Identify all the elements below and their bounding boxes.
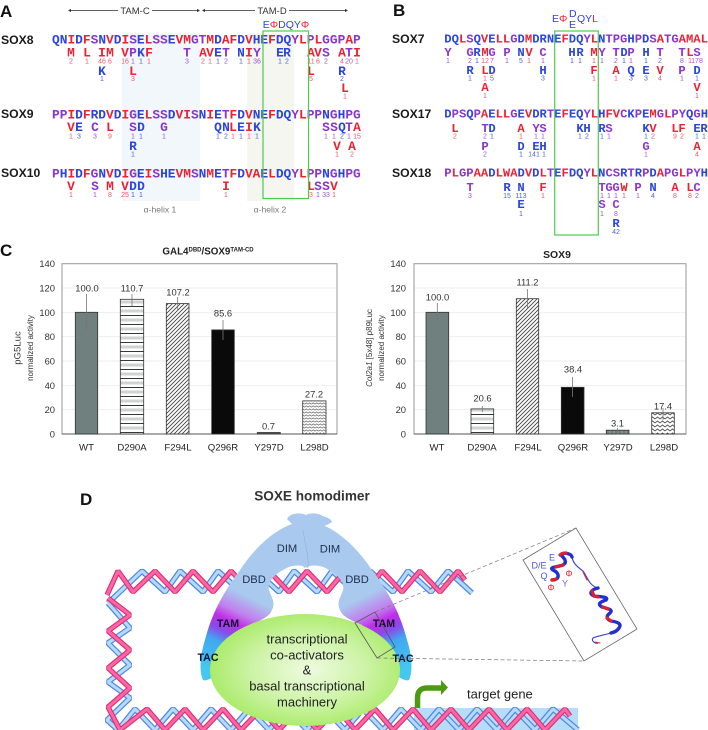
y axis ticks right: 60 xyxy=(396,356,406,366)
TAM-C range arrow: TAM-C xyxy=(120,6,150,17)
SOX8 variant counts row 1: 2 xyxy=(324,58,328,66)
SOX17 variants row 2: 1 xyxy=(644,152,648,158)
SOX7 variant counts row 2: 1 xyxy=(695,76,699,82)
value labels right: 17.4 xyxy=(654,400,672,412)
TAM-D range arrow xyxy=(202,6,348,17)
SOX8 variants row 2 and 3: L xyxy=(341,81,349,96)
zoomed structure panel: Y xyxy=(562,578,568,588)
category labels right xyxy=(430,442,678,454)
SOX8 variants row 2 and 3: K LL R xyxy=(98,64,346,79)
value labels right: 20.6 xyxy=(473,392,492,404)
SOX9 sequence: PPIDFRDVDIGELSSDVISNIETFDVNEFDQYLPPNGHPG xyxy=(52,108,361,122)
SOX9 variants row 2: 1 xyxy=(131,152,135,158)
SOX9 variant counts row 1: 1 xyxy=(255,134,259,140)
chart title left: DBD xyxy=(189,248,202,254)
SOX9 variant counts row 1: 1 xyxy=(332,134,336,140)
SOX9 variants row 2: 2 xyxy=(350,152,354,158)
value labels right: 38.4 xyxy=(564,364,582,374)
y axis ticks right: 0 xyxy=(401,428,406,440)
SOX9 variant counts row 1: 3 xyxy=(77,134,81,140)
SOX9 variant counts row 1: 1 xyxy=(139,134,143,140)
SOX9 variant counts row 1: 1 xyxy=(231,134,235,140)
bars left xyxy=(75,299,326,434)
SOX17 variant counts row 1: 1 xyxy=(490,134,494,140)
SOX17 variant counts row 1: 2 xyxy=(453,134,457,140)
SOX7 variant counts row 1: 1 xyxy=(688,58,692,65)
SOX9 variants row 2: R VA xyxy=(129,139,356,154)
SOX7 variant counts row 2: 1 xyxy=(680,76,684,82)
y axis subtitle right: normalized activity xyxy=(377,315,386,381)
SOX8 variant counts row 1: 36 xyxy=(253,58,261,66)
SOX7 variant counts row 1: 5 xyxy=(519,58,523,65)
y axis ticks left: 140 xyxy=(39,258,55,269)
SOX8 variant counts row 1: 6 xyxy=(108,58,112,66)
category labels left: Q296R xyxy=(208,442,238,454)
SOX18 variant counts row 1: 113 xyxy=(515,193,527,200)
category labels right: Q296R xyxy=(558,442,588,454)
SOX18 variants rows 2 and 3: 42 xyxy=(612,229,620,236)
category labels right: WT xyxy=(430,442,445,454)
SOX7 variants row 1: YGRMGP NV C HR MYTDP H TTLS xyxy=(444,46,701,60)
SOX10 label: SOX10 xyxy=(1,166,41,180)
SOX17 variant counts row 1: 1 xyxy=(534,134,538,140)
SOX10 variant counts: 1 xyxy=(332,192,336,199)
SOX8 variant counts row 1: 2 xyxy=(69,58,73,66)
SOX7 variant counts row 1: 12 xyxy=(481,58,489,65)
SOX7 variant counts row 2: 1 xyxy=(614,76,618,82)
DIM label right: DIM xyxy=(320,544,340,556)
y axis ticks left: 40 xyxy=(45,380,55,391)
TAM-D consensus A: EΦDQYΦ xyxy=(263,19,309,31)
SOXE monomer left xyxy=(201,513,311,680)
SOX17 variant counts row 1: 1 xyxy=(519,134,523,140)
SOX18 variant counts row 1: 1 xyxy=(541,193,545,200)
y axis ticks left xyxy=(39,258,55,440)
SOX7 variants row 3: AV xyxy=(481,81,701,95)
y axis title right: Col2a1 [5x48] p89Luc xyxy=(365,309,374,387)
SOX17 variant counts row 1: 1 xyxy=(578,134,582,140)
panel letter D: D xyxy=(80,490,92,509)
SOX9 variants row 1: VE C L SD G QNLEIK SSQTA xyxy=(67,120,361,135)
SOX18 variant counts row 1: 4 xyxy=(651,193,655,200)
y axis title left: pG5Luc xyxy=(12,331,24,365)
category labels right: L298D xyxy=(650,442,678,454)
SOX7 variant counts row 1: 1 xyxy=(541,58,545,65)
SOX7 variant counts row 2: 3 xyxy=(541,76,545,82)
SOX17 variants row 2: 2 xyxy=(483,152,487,158)
TAM label left: TAM xyxy=(217,618,239,630)
SOX7 variants row 3: 1 xyxy=(695,93,699,100)
category labels left: D290A xyxy=(117,442,147,454)
zoomed structure panel: Φ xyxy=(565,568,573,578)
SOX10 variant counts: 1 xyxy=(93,192,97,199)
SOX10 variant counts: 33 xyxy=(322,192,330,199)
SOX8 variants row 2 and 3: 3 xyxy=(131,76,135,83)
SOX7 variant counts row 1: 1 xyxy=(600,58,604,65)
oval text: basal transcriptional xyxy=(249,678,365,694)
category labels left: L298D xyxy=(300,442,329,454)
SOX8 variant counts row 1: 1 xyxy=(355,58,359,66)
TAM-D range arrow: TAM-D xyxy=(257,6,287,17)
chart title left: GAL4 xyxy=(162,246,189,258)
SOX9 variant counts row 1: 1 xyxy=(216,134,220,140)
category labels left xyxy=(79,442,329,454)
SOX8 variant counts row 1: 6 xyxy=(316,58,320,66)
SOX7 variants row 2: R LDH FA QE V P D xyxy=(466,64,701,78)
panel A: SOX8 SOX9 SOX10 alignment xyxy=(0,2,361,214)
SOX7 sequence: DQLSQVELLGDMDRNEFDQYLNTPGHPDSATGAMAL xyxy=(444,32,708,46)
y axis ticks left: 0 xyxy=(50,428,55,440)
SOX10 variant counts: 3 xyxy=(309,192,313,199)
SOX7 variant counts row 2: 4 xyxy=(658,76,662,82)
SOX9 variant counts row 1: 1 xyxy=(69,134,73,140)
helix ribbon xyxy=(552,553,620,643)
y axis ticks right: 140 xyxy=(390,258,406,269)
value labels left: 100.0 xyxy=(75,282,99,294)
value labels left: 107.2 xyxy=(166,286,190,298)
category labels right: D290A xyxy=(467,442,497,454)
SOX8 variant counts row 1: 2 xyxy=(285,58,289,66)
SOX8 sequence: QNIDFSNVDISELSSEVMGTMDAFDVHEFDQYLPLGGPAP xyxy=(52,32,361,48)
SOX7 variant counts row 2: 1 xyxy=(483,76,487,82)
SOX17 variants row 2: 1 xyxy=(519,152,523,158)
SOXE monomer right xyxy=(301,513,411,680)
SOX17 variant counts row 1: 2 xyxy=(483,134,487,140)
SOX8 variant counts row 1: 1 xyxy=(85,58,89,66)
SOX8 variant counts row 1: 3 xyxy=(185,58,189,66)
SOX18 variant counts row 1: 1 xyxy=(636,193,640,200)
SOX8 variant counts row 1: 1 xyxy=(247,58,251,66)
SOX7 variant counts row 1: 1 xyxy=(622,58,626,65)
TAM-D consensus B: QYL xyxy=(577,13,598,25)
SOX17 sequence: DPSQPAELLGEVDRTEFEQYLHFVCKPEMGLPYQGH xyxy=(444,107,708,121)
SOX9 variant counts row 1: 15 xyxy=(353,134,361,140)
SOX7 variant counts row 1: 1 xyxy=(570,58,574,65)
TAM-C range arrow xyxy=(68,6,200,17)
value labels left: 85.6 xyxy=(214,308,232,318)
y axis ticks left: 20 xyxy=(45,404,55,415)
chart title right: SOX9 xyxy=(543,250,571,261)
SOX8 variants row 2 and 3 xyxy=(98,64,349,100)
panel B: SOX7 SOX17 SOX18 alignment xyxy=(392,1,708,236)
SOX18 variant counts row 1: 3 xyxy=(468,193,472,200)
SOX7 variant counts row 1: 178 xyxy=(691,58,703,65)
y axis ticks right xyxy=(390,258,406,440)
y axis ticks left: 60 xyxy=(45,356,55,366)
value labels right: 111.2 xyxy=(516,276,539,288)
SOX17 variant counts row 1: 1 xyxy=(600,134,604,140)
SOX17 variant counts row 1: 9 xyxy=(673,134,677,140)
SOX7 variant counts row 1: 1 xyxy=(527,58,531,65)
SOX8 variant counts row 1: 20 xyxy=(345,58,353,66)
SOX7 variant counts row 1: 1 xyxy=(446,58,450,65)
panel title: SOXE homodimer xyxy=(254,488,370,504)
SOX10 variant counts: 1 xyxy=(316,192,320,199)
SOX10 variants: V S MVDD ILSSV xyxy=(67,179,338,194)
value labels right: 3.1 xyxy=(611,418,624,428)
SOX17 variant counts row 1: 1 xyxy=(541,134,545,140)
SOX9 variant counts row 1: 1 xyxy=(324,134,328,140)
SOX8 variant counts row 1: 4 xyxy=(340,58,344,66)
SOX9 variant counts row 1: 1 xyxy=(162,134,166,140)
alpha-helix 1 label: α-helix 1 xyxy=(144,204,177,214)
SOX8 variant counts row 1: 46 xyxy=(98,58,106,66)
TAM-D consensus B: D xyxy=(569,8,577,20)
SOX9 variant counts row 1: 9 xyxy=(108,134,112,140)
TAM label right: TAM xyxy=(373,618,395,630)
SOX7 variant counts row 2: 1 xyxy=(468,76,472,82)
y axis ticks left: 100 xyxy=(39,307,55,318)
alpha-helix 1 shading xyxy=(122,33,200,201)
SOX7 variant counts row 1: 2 xyxy=(468,58,472,65)
chart title left: TAM-CD xyxy=(230,248,254,254)
zoomed structure panel: Q xyxy=(540,571,548,581)
SOX18 variant counts row 1: 1 xyxy=(607,193,611,200)
SOX17 variants row 2: 141 xyxy=(528,152,540,158)
TAM-D consensus B xyxy=(552,8,598,31)
SOX18 variants rows 2 and 3: 8 xyxy=(614,211,618,218)
transcription start arrow xyxy=(418,680,448,708)
SOX18 variants rows 2 and 3 xyxy=(517,198,620,236)
zoomed structure panel: E xyxy=(549,552,555,562)
SOX9 variant counts row 1: 1 xyxy=(347,134,351,140)
value labels left: 110.7 xyxy=(121,282,143,294)
DBD label right: DBD xyxy=(345,574,369,586)
chart: SOX9 activity xyxy=(365,250,686,454)
SOX8 variant counts row 1: 11 xyxy=(307,58,315,66)
SOX7 variants row 3: 1 xyxy=(483,93,487,100)
alpha-helix 2 label: α-helix 2 xyxy=(254,204,287,214)
SOX9 variant counts row 1: 1 xyxy=(131,134,135,140)
SOX9 variants row 2: 1 xyxy=(335,152,339,158)
DBD label left: DBD xyxy=(242,574,266,586)
panel letter A: A xyxy=(0,2,12,21)
SOX17 variants row 2: 4 xyxy=(695,152,699,158)
zoomed structure panel: D/E xyxy=(531,560,547,570)
SOX7 variant counts row 2: 5 xyxy=(490,76,494,82)
TAC label left: TAC xyxy=(198,652,219,664)
SOX7 variant counts row 1: 1 xyxy=(505,58,509,65)
SOX7 variant counts row 1: 1 xyxy=(629,58,633,65)
SOX17 variants row 2: 1 xyxy=(542,152,546,158)
SOX8 variant counts row 1: 1 xyxy=(131,58,135,66)
DIM label left: DIM xyxy=(277,543,297,555)
zoomed structure panel xyxy=(523,528,637,661)
green motif box A xyxy=(263,31,308,198)
panel letter B: B xyxy=(393,1,405,20)
DNA loop xyxy=(107,571,578,730)
SOX7 variant counts row 2: 3 xyxy=(644,76,648,82)
SOX18 variant counts row 1: 2 xyxy=(695,193,699,200)
SOX7 variant counts row 1: 2 xyxy=(658,58,662,65)
SOX10 variant counts: 1 xyxy=(224,192,228,199)
SOX7 variant counts row 2: 1 xyxy=(592,76,596,82)
SOX8 variant counts row 1: 1 xyxy=(278,58,282,66)
SOX18 variant counts row 1: 8 xyxy=(673,193,677,200)
error bars right xyxy=(437,289,663,434)
SOX10 variant counts: 25 xyxy=(121,192,129,199)
category labels right: Y297D xyxy=(603,442,633,454)
SOX7 variant counts row 1: 1 xyxy=(644,58,648,65)
SOX17 variant counts row 1: 1 xyxy=(644,134,648,140)
SOX18 variant counts row 1: 1 xyxy=(614,193,618,200)
panel D: SOXE homodimer model xyxy=(80,488,637,730)
value labels left: 0.7 xyxy=(262,420,275,432)
SOX8 label: SOX8 xyxy=(1,33,34,47)
SOX18 variants rows 2 and 3: E SC xyxy=(517,198,620,212)
SOX18 variant counts row 1: 1 xyxy=(622,193,626,200)
SOX7 variant counts row 1: 1 xyxy=(592,58,596,65)
SOX18 variants rows 2 and 3: R xyxy=(612,217,620,231)
SOX17 label: SOX17 xyxy=(392,107,432,121)
SOX7 variant counts row 1: 1 xyxy=(578,58,582,65)
SOX17 variant counts row 1: 2 xyxy=(680,134,684,140)
SOX17 variant counts row 1: 1 xyxy=(702,134,706,140)
TAM-D consensus B: EΦ xyxy=(552,13,567,25)
SOX18 variants row 1: T RN F TGGW P N ALC xyxy=(466,181,701,195)
SOX17 variant counts row 1: 1 xyxy=(607,134,611,140)
SOX8 variant counts row 1: 1 xyxy=(239,58,243,66)
SOX18 sequence: PLGPAADLWADVDLTEFDQYLNCSRTRPDAPGLPYH xyxy=(444,166,708,180)
SOX9 variant counts row 1: 1 xyxy=(247,134,251,140)
SOX17 variants row 2: P DEH G A xyxy=(481,140,701,154)
SOX10 variant counts: 1 xyxy=(139,192,143,199)
SOX7 variant counts row 1: 7 xyxy=(490,58,494,65)
SOX18 variant counts row 1: 8 xyxy=(688,193,692,200)
SOX18 variants rows 2 and 3: 1 xyxy=(600,211,604,218)
alpha-helix 2 shading xyxy=(247,33,294,201)
SOX10 sequence: PHIDFGNVDIGEISHEVMSNMETFDVAELDQYLPPNGHPG xyxy=(52,166,361,182)
SOX18 variant counts row 1: 1 xyxy=(600,193,604,200)
SOX17 variant counts row 1: 2 xyxy=(585,134,589,140)
value labels left xyxy=(75,282,323,432)
SOX9 label: SOX9 xyxy=(1,107,34,121)
zoomed structure panel: Φ xyxy=(547,582,555,592)
y axis ticks right: 20 xyxy=(396,404,406,415)
oval text: co-activators xyxy=(270,648,344,662)
SOX10 variant counts: 1 xyxy=(131,192,135,199)
bars right xyxy=(426,299,674,434)
category labels left: WT xyxy=(79,442,94,454)
oval text: machinery xyxy=(277,694,337,710)
SOX8 variant counts row 1: 1 xyxy=(208,58,212,66)
TAM-D consensus B: E xyxy=(569,19,576,31)
panel letter C: C xyxy=(0,241,12,260)
category labels right: F294L xyxy=(514,442,542,454)
chart title left: /SOX9 xyxy=(202,246,231,258)
category labels left: Y297D xyxy=(254,442,284,454)
y axis ticks right: 80 xyxy=(396,331,406,342)
oval text xyxy=(249,632,365,710)
error bars left xyxy=(86,294,223,340)
SOX10 variant counts: 1 xyxy=(69,192,73,199)
SOX8 variants row 2 and 3: 1 xyxy=(343,94,347,100)
TAC label right: TAC xyxy=(392,653,414,665)
SOX17 variant counts row 1: 1 xyxy=(695,134,699,140)
SOX8 variants row 2 and 3: 5 xyxy=(309,76,313,83)
target gene label: target gene xyxy=(467,686,533,702)
zoom selection box xyxy=(355,612,395,658)
value labels right xyxy=(426,276,672,428)
SOX9 variant counts row 1: 2 xyxy=(340,134,344,140)
SOX8 variant counts row 1: 1 xyxy=(139,58,143,66)
SOX8 variant counts row 1: 2 xyxy=(224,58,228,66)
SOX9 variant counts row 1: 2 xyxy=(224,134,228,140)
SOX17 variants row 1: L TD A YS KHRS KVLF ER xyxy=(451,122,708,136)
oval text: transcriptional xyxy=(267,632,348,646)
SOX17 variant counts row 1: 2 xyxy=(651,134,655,140)
target gene highlight band xyxy=(414,708,578,730)
SOX7 variant counts row 1: 2 xyxy=(614,58,618,65)
SOX10 variant counts: 8 xyxy=(108,192,112,199)
SOX8 variant counts row 1: 2 xyxy=(201,58,205,66)
SOX8 variant counts row 1: 16 xyxy=(121,58,129,66)
SOX7 variant counts row 1: 1 xyxy=(475,58,479,65)
SOX8 variant counts row 1: 1 xyxy=(147,58,151,66)
zoom dashed lines xyxy=(375,528,584,661)
SOX7 label: SOX7 xyxy=(392,32,425,46)
SOX9 variant counts row 1: 3 xyxy=(93,134,97,140)
value labels right: 100.0 xyxy=(426,292,449,302)
y axis ticks right: 40 xyxy=(396,380,406,391)
SOX9 variant counts row 1: 1 xyxy=(239,134,243,140)
SOX8 variants row 2 and 3: 1 xyxy=(100,76,104,83)
oval text: & xyxy=(303,662,312,678)
SOX18 variant counts row 1: 15 xyxy=(503,193,511,200)
green motif box B xyxy=(555,31,598,235)
y axis ticks left: 120 xyxy=(39,282,55,294)
SOX8 variants row 1: MLIMVPKF T AVET NIY ER AVS ATI xyxy=(67,46,361,60)
SOX18 variants rows 2 and 3: 1 xyxy=(519,211,523,218)
SOX7 variant counts row 2: 3 xyxy=(629,76,633,82)
SOX18 label: SOX18 xyxy=(392,166,432,180)
y axis subtitle left: normalized activity xyxy=(26,315,35,381)
y axis ticks right: 100 xyxy=(390,307,406,318)
y axis ticks right: 120 xyxy=(390,282,406,294)
co-activator oval xyxy=(210,614,400,726)
category labels left: F294L xyxy=(164,442,192,454)
y axis ticks left: 80 xyxy=(45,331,55,342)
SOX8 variant counts row 1: 1 xyxy=(216,58,220,66)
SOX7 variant counts row 1: 8 xyxy=(680,58,684,65)
SOX8 variants row 2 and 3: 2 xyxy=(340,76,344,83)
value labels left: 27.2 xyxy=(305,388,323,400)
chart: GAL4 SOX9 TAM-CD activity xyxy=(12,246,337,454)
